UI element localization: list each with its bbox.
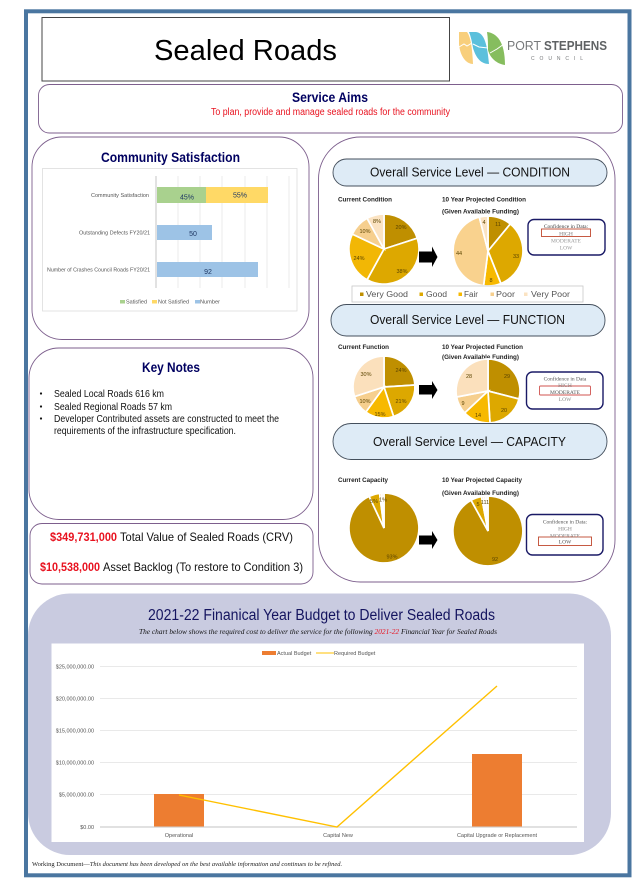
pie chart: current function: 24% [395, 368, 407, 374]
chart labels: condition: (Given Available Funding) [442, 208, 519, 216]
panel: service aims [38, 84, 622, 133]
combo chart: budget: Capital Upgrade or Replacement [457, 833, 538, 839]
chart labels: function [338, 344, 523, 361]
bar chart: community satisfaction: 55% [233, 192, 247, 200]
confidence box: condition: MODERATE [551, 238, 582, 244]
confidence box: condition [528, 220, 605, 255]
confidence box: condition: Confidence in Data: [544, 223, 589, 230]
panel: asset values [30, 524, 313, 584]
pie chart: projected function: 14 [475, 413, 481, 419]
confidence box: function: MODERATE [550, 390, 581, 396]
combo chart: budget: $25,000,000.00 [56, 664, 94, 670]
chart labels: capacity: (Given Available Funding) [442, 490, 519, 497]
legend: condition: Good [426, 290, 447, 299]
combo chart: budget: $20,000,000.00 [56, 696, 94, 702]
text block: budget description: The chart below shows the required cost to deliver the service for the following 2021-22 Financial Year for Sealed Roads [139, 627, 497, 636]
bar chart: community satisfaction: 92 [204, 269, 212, 276]
heading: condition [333, 159, 607, 186]
pie chart: projected function [456, 359, 520, 423]
pie chart: projected condition: 8 [489, 278, 493, 284]
chart labels: condition: Current Condition [338, 196, 392, 204]
confidence box: function: HIGH [558, 383, 572, 389]
title box: Sealed Roads [154, 35, 337, 67]
pie chart: current condition: 20% [395, 225, 407, 231]
pie chart: projected condition: 11 [495, 222, 501, 228]
bar chart: community satisfaction: Satisfied [126, 300, 147, 306]
combo chart: budget: $15,000,000.00 [56, 728, 94, 734]
panel: asset values: $349,731,000 [50, 530, 117, 544]
confidence box: capacity: Confidence in Data: [543, 518, 588, 526]
heading: key notes: Key Notes [142, 359, 200, 375]
pie chart: projected function: 20 [501, 408, 507, 414]
combo chart: budget: $10,000,000.00 [56, 760, 94, 766]
confidence box: capacity: LOW [559, 540, 572, 546]
legend: budget [262, 651, 376, 657]
legend: condition: Very Poor [531, 290, 570, 299]
legend: condition: Very Good [366, 290, 408, 299]
pie chart: projected capacity: 92 [492, 557, 498, 563]
chart labels: capacity [338, 477, 523, 497]
bar chart: community satisfaction: Number of Crashes Council Roads FY20/21 [47, 268, 150, 274]
confidence box: capacity: MODERATE [550, 534, 581, 540]
pie chart: current capacity [349, 493, 419, 563]
panel: budget [28, 594, 611, 855]
chart labels: condition: 10 Year Projected Condition [442, 196, 526, 204]
bar chart: community satisfaction: Number [200, 300, 220, 306]
pie chart: projected condition [453, 216, 523, 286]
legend: condition: Poor [496, 290, 515, 299]
logo: Port Stephens Council: STEPHENS [544, 38, 607, 53]
text block: key notes list [40, 389, 279, 437]
pie chart: current function: 15% [374, 412, 386, 418]
chart labels: function: Current Function [338, 344, 389, 351]
confidence box: condition: LOW [560, 246, 573, 252]
bar chart: community satisfaction: Outstanding Defects FY20/21 [79, 230, 150, 236]
panel: asset values: Total Value of Sealed Roads (CRV) [120, 530, 293, 544]
pie chart: current capacity: 93% [386, 554, 398, 560]
chart labels: condition [338, 196, 526, 216]
pie chart: current capacity: 5% [370, 499, 378, 505]
pie chart: projected function: 28 [466, 374, 472, 380]
arrow: function [419, 381, 438, 399]
logo: Port Stephens Council: PORT [507, 38, 541, 53]
heading: function: Overall Service Level — FUNCTION [370, 313, 565, 327]
confidence box: capacity [526, 514, 603, 555]
pie chart: current condition: 24% [353, 256, 365, 262]
pie chart: projected capacity: 111 [481, 500, 489, 506]
confidence box: function: Confidence in Data [544, 376, 587, 382]
pie chart: projected condition: 4 [482, 220, 486, 226]
bar chart: community satisfaction: 50 [189, 231, 197, 238]
text block: key notes list: Sealed Regional Roads 57 km [54, 402, 172, 413]
arrow: condition [419, 246, 438, 267]
pie chart: current function: 21% [395, 399, 407, 405]
combo chart: budget: $5,000,000.00 [59, 792, 94, 798]
bar chart: community satisfaction: 45% [180, 194, 194, 202]
arrow: capacity [419, 531, 438, 549]
combo chart: budget: Capital New [323, 833, 353, 839]
pie chart: current condition: 38% [396, 269, 408, 275]
panel: key notes [29, 348, 313, 520]
pie chart: current function: 10% [359, 399, 371, 405]
panel: service aims: To plan, provide and manage sealed roads for the community [211, 107, 450, 118]
chart labels: function: 10 Year Projected Function [442, 344, 523, 351]
chart labels: function: (Given Available Funding) [442, 354, 519, 361]
confidence box: function: LOW [559, 397, 572, 403]
logo: Port Stephens Council: COUNCIL [531, 56, 583, 62]
pie chart: projected function: 29 [504, 374, 510, 380]
pie chart: projected condition: 44 [456, 251, 462, 257]
pie chart: projected capacity: 5 [476, 502, 480, 508]
pie chart: current condition: 8% [373, 219, 381, 225]
pie chart: projected capacity [453, 496, 523, 566]
heading: capacity: Overall Service Level — CAPACITY [373, 435, 567, 449]
pie chart: projected condition: 33 [513, 254, 519, 260]
confidence box: function [526, 372, 603, 409]
bar chart: community satisfaction: Not Satisfied [158, 300, 189, 306]
chart labels: capacity: 10 Year Projected Capacity [442, 477, 523, 484]
pie chart: current capacity: 1% [379, 498, 387, 504]
panel: asset values: $10,538,000 [40, 560, 100, 574]
combo chart: budget [52, 644, 584, 842]
text block: key notes list: requirements of the infrastructure specification. [54, 426, 236, 437]
heading: capacity [333, 424, 607, 460]
text block: key notes list: Developer Contributed assets are constructed to meet the [54, 414, 279, 425]
panel: overall service levels [318, 137, 615, 582]
panel: asset values: Asset Backlog (To restore to Condition 3) [103, 560, 303, 574]
panel: service aims: Service Aims [292, 89, 368, 105]
pie chart: current condition: 10% [359, 229, 371, 235]
heading: condition: Overall Service Level — CONDITION [370, 166, 570, 180]
confidence box: condition: HIGH [559, 232, 573, 238]
heading: budget: 2021-22 Finanical Year Budget to Deliver Sealed Roads [148, 607, 495, 624]
panel: community satisfaction [32, 137, 309, 340]
footer note: Working Document—This document has been developed on the best available information and continues to be refined. [32, 861, 342, 868]
text block: key notes list: Sealed Local Roads 616 km [54, 389, 164, 400]
heading: community satisfaction: Community Satisfaction [101, 149, 240, 165]
bar chart: community satisfaction: Community Satisfaction [91, 193, 149, 199]
pie chart: current function: 30% [360, 372, 372, 378]
legend: budget: Required Budget [334, 651, 376, 657]
combo chart: budget: $0.00 [80, 825, 94, 831]
bar chart: community satisfaction [42, 168, 297, 311]
logo: Port Stephens Council [459, 32, 607, 65]
chart labels: capacity: Current Capacity [338, 477, 389, 484]
legend: budget: Actual Budget [277, 651, 312, 657]
pie chart: current function [353, 356, 415, 418]
pie chart: current condition [349, 214, 419, 284]
legend: condition [352, 286, 583, 302]
pie chart: projected function: 9 [461, 401, 465, 407]
confidence box: capacity: HIGH [558, 526, 572, 532]
title box [42, 18, 450, 81]
legend: condition: Fair [464, 290, 478, 299]
heading: function [331, 304, 605, 336]
combo chart: budget: Operational [165, 833, 193, 839]
